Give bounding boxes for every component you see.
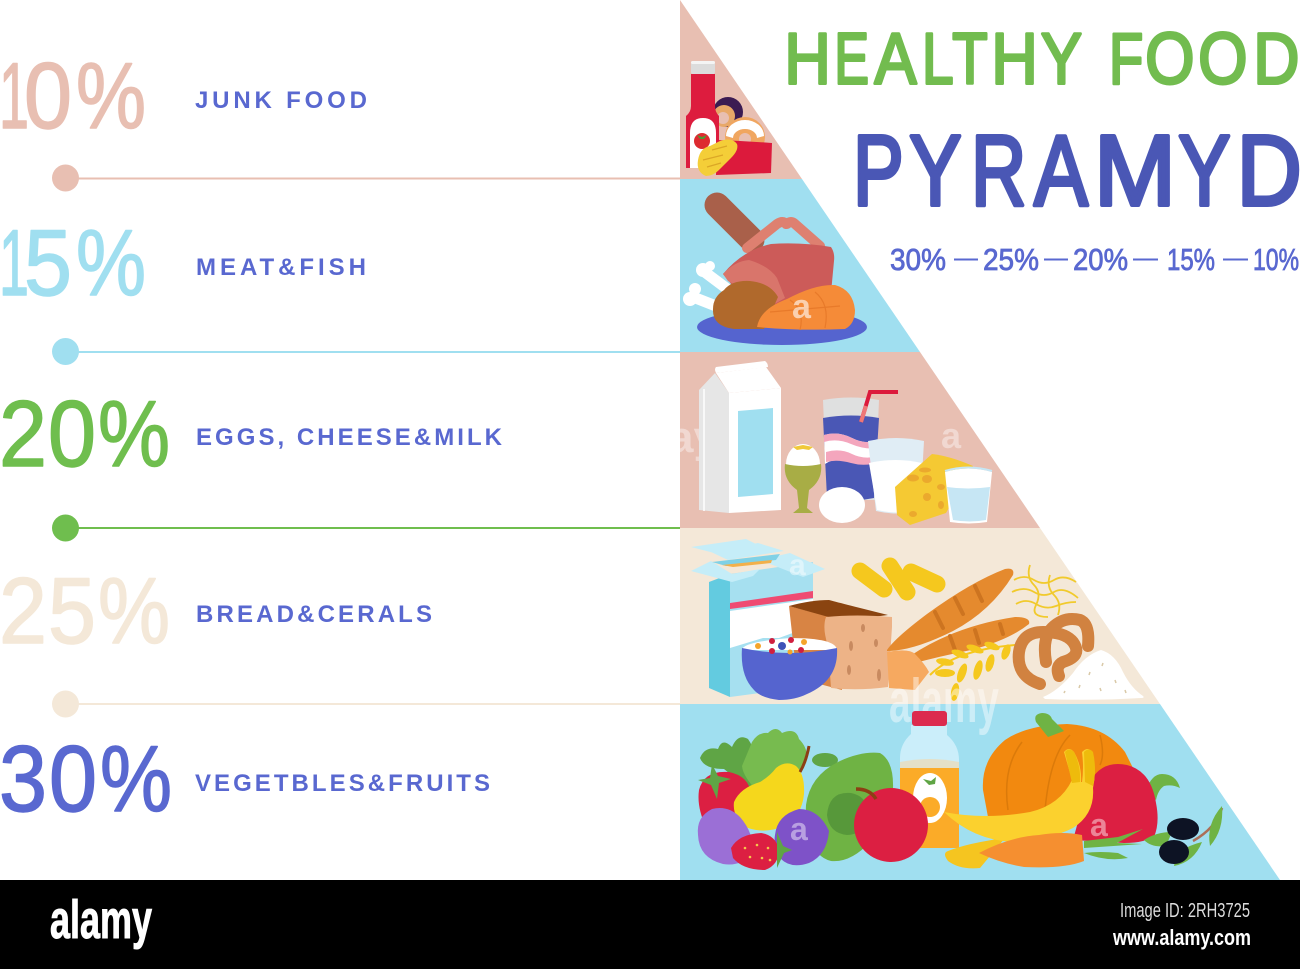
icon: fries box [698, 140, 772, 176]
watermark: a [941, 415, 962, 456]
pyramid tier backgrounds [680, 0, 1280, 880]
heading: healthy food: L [922, 20, 954, 100]
heading: healthy food: O [1145, 20, 1194, 100]
percentage sequence: 25% [983, 242, 1039, 277]
legend row: 30% vegetables and fruits: 0 [49, 726, 97, 831]
icon: plums: a [790, 811, 808, 847]
legend row: 25% bread and cereals [0, 558, 680, 718]
heading: pyramyd: M [1094, 115, 1176, 227]
legend row: 20% eggs, cheese and milk [0, 381, 680, 542]
legend row: 25% bread and cereals: BREAD&CERALS [196, 601, 432, 628]
legend row: 25% bread and cereals: % [98, 558, 170, 663]
icon: vegetables and fruits group [698, 711, 1222, 870]
legend row: 25% bread and cereals: 2 [0, 558, 47, 663]
heading: pyramyd: Y [909, 115, 962, 227]
icon: carrot [979, 829, 1143, 867]
icon: avocado [806, 753, 893, 861]
legend row: 30% vegetables and fruits: 3 [0, 726, 47, 831]
icon: banana [944, 749, 1095, 868]
image id: Image ID: 2RH3725 [1120, 900, 1250, 922]
legend row: 30% vegetables and fruits: % [100, 726, 172, 831]
icon: loaf of bread [789, 600, 892, 690]
legend row: 20% eggs, cheese and milk: EGGS, CHEESE&MILK [196, 424, 503, 451]
icon: baguettes [887, 569, 1029, 690]
icon: egg in a cup [785, 444, 821, 513]
icon: donuts [713, 97, 765, 157]
icon: salmon steak [757, 285, 855, 330]
heading: healthy food: Y [1041, 20, 1081, 100]
icon: junk food [686, 61, 772, 176]
legend row: 15% meat and fish: 5 [24, 210, 72, 315]
watermark: alamy [889, 667, 999, 736]
legend row: 25% bread and cereals: 5 [48, 558, 96, 663]
legend row: 15% meat and fish [0, 210, 680, 365]
icon: whole egg [819, 487, 865, 523]
icon: lettuce leaves [700, 729, 807, 793]
legend row: 20% eggs, cheese and milk: 0 [48, 381, 96, 486]
heading: healthy food: T [952, 20, 988, 100]
heading: healthy food: H [991, 20, 1038, 100]
legend row: 10% junk food: % [76, 43, 146, 148]
footer logo: alamy [50, 890, 152, 950]
percentage sequence: 20% [1073, 242, 1128, 277]
icon: tomato [698, 764, 751, 826]
legend row: 30% vegetables and fruits: VEGETBLES&FRUITS [195, 770, 490, 797]
icon: glass with drink and straw [823, 392, 898, 500]
percentage sequence: 30% [890, 242, 946, 277]
footer bar [0, 880, 1300, 969]
heading: pyramyd: Y [1178, 115, 1230, 227]
icon: plums [698, 808, 829, 865]
heading: pyramyd: P [853, 115, 904, 227]
icon: pumpkin [983, 713, 1135, 822]
icon: olive branch [1144, 806, 1222, 866]
title [784, 20, 1300, 277]
icon: red pepper [1073, 764, 1180, 843]
watermark: ay [669, 413, 718, 462]
legend row: 15% meat and fish: % [76, 210, 146, 315]
icon: plate [697, 309, 867, 345]
heading: healthy food: E [834, 20, 869, 100]
icon: bowl of cereal [742, 637, 837, 700]
heading: pyramyd: R [971, 115, 1026, 227]
icon: flour pile [1043, 650, 1144, 700]
legend row: 10% junk food [0, 43, 680, 192]
icon: glass of milk [868, 438, 924, 514]
icon: apple [854, 788, 928, 862]
legend row: 15% meat and fish: 1 [0, 210, 29, 315]
icon: noodles [1012, 565, 1078, 617]
icon: dairy group [669, 361, 992, 525]
heading: healthy food: O [1198, 20, 1248, 100]
icon: strawberry [731, 832, 792, 870]
heading: healthy food: A [874, 20, 916, 100]
icon: salmon steak: a [792, 288, 812, 326]
icon: cereal box: a [789, 549, 806, 582]
icon: pretzel [1019, 619, 1088, 684]
legend row: 20% eggs, cheese and milk: 2 [0, 381, 47, 486]
legend row: 10% junk food: JUNK FOOD [195, 87, 367, 114]
heading: pyramyd: A [1034, 115, 1088, 227]
icon: red pepper: a [1090, 807, 1108, 843]
percentage sequence: 15% [1167, 242, 1215, 277]
legend row: 30% vegetables and fruits [0, 726, 490, 831]
icon: milk carton [699, 361, 781, 513]
icon: pear [734, 746, 838, 831]
icon: macaroni [860, 566, 937, 592]
icon: ham [723, 222, 834, 308]
heading: healthy food: H [784, 20, 831, 100]
legend row: 10% junk food: 0 [24, 43, 72, 148]
icon: wheat ear [930, 640, 1015, 702]
legend row: 15% meat and fish: MEAT&FISH [196, 254, 366, 281]
icon: juice bottle [900, 711, 959, 848]
icon: cheese wedge [895, 454, 973, 525]
icon: cup of water [945, 468, 992, 524]
icon: sausage [707, 196, 752, 240]
percentage sequence [890, 242, 1299, 277]
left legend: percentages and food groups [0, 43, 680, 831]
icon: ketchup bottle [686, 61, 719, 168]
legend row: 20% eggs, cheese and milk: % [98, 381, 170, 486]
icon: meat and fish plate [683, 196, 867, 345]
pyramid [669, 0, 1280, 880]
icon: cereal box [691, 539, 825, 697]
heading: healthy food: F [1109, 20, 1143, 100]
website: www.alamy.com [1112, 925, 1251, 950]
icon: chicken legs [683, 261, 778, 329]
icon: bread and cereals group [691, 539, 1144, 736]
legend row: 10% junk food: 1 [0, 43, 29, 148]
